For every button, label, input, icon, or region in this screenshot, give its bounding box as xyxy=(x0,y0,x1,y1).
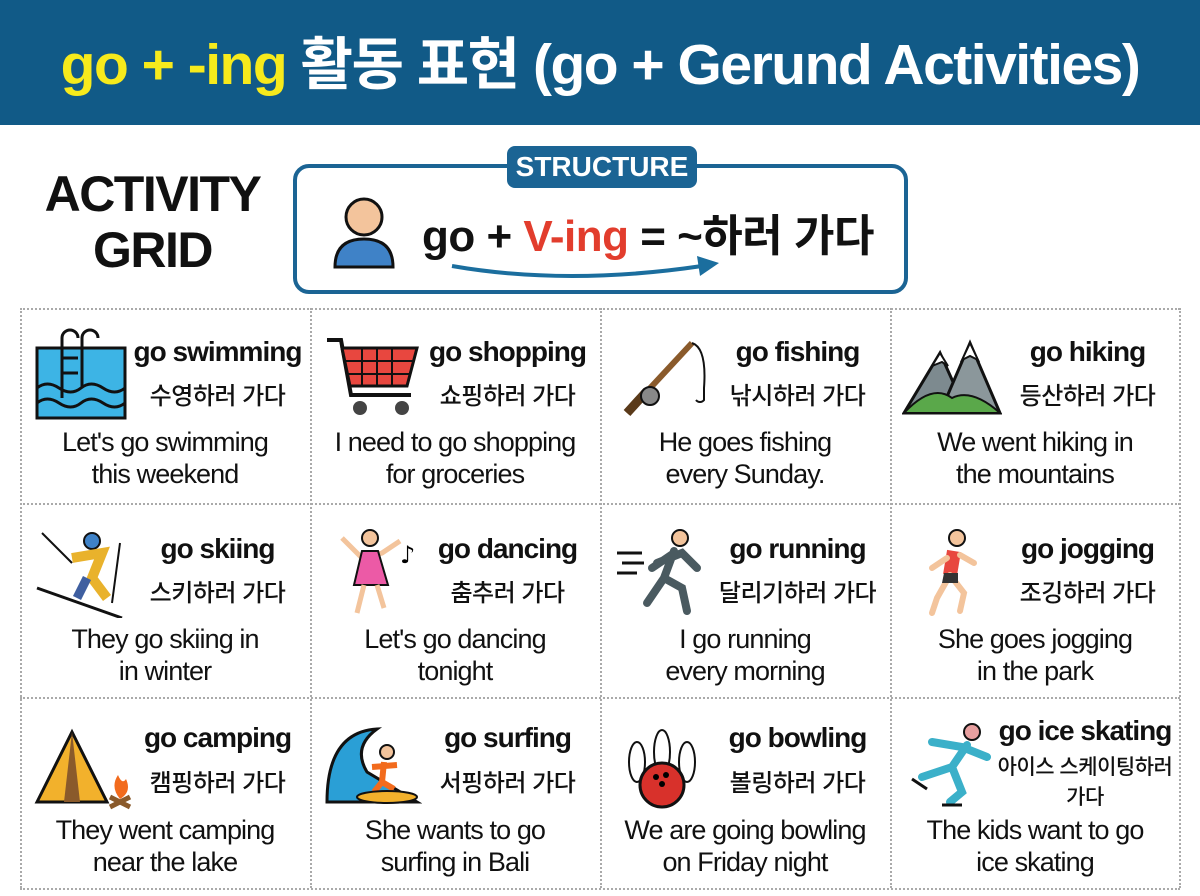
icon: runner xyxy=(617,529,701,615)
panel: go hiking: 등산하러 가다 xyxy=(1020,383,1155,410)
panel: go skiing: in winter xyxy=(119,656,211,686)
panel: go hiking xyxy=(902,336,1156,489)
panel: go swimming: go swimming xyxy=(134,336,301,367)
panel: go surfing: She wants to go xyxy=(365,815,545,845)
panel: go skiing xyxy=(36,532,286,686)
title banner: go + -ing 활동 표현 (go + Gerund Activities) xyxy=(61,33,1139,97)
icon: mountains xyxy=(902,339,1002,414)
panel: go ice skating: 가다 xyxy=(1066,786,1104,809)
panel: go fishing: every Sunday. xyxy=(666,459,824,489)
panel: go jogging: She goes jogging xyxy=(938,624,1132,654)
structure box xyxy=(293,164,908,294)
icon: surfer xyxy=(326,727,422,804)
heading: activity grid: GRID xyxy=(93,222,212,278)
panel: go swimming: Let's go swimming xyxy=(62,427,268,457)
formula: go + V-ing = ~하러 가다 xyxy=(422,212,874,261)
panel: go hiking: the mountains xyxy=(956,459,1114,489)
panel: go ice skating: go ice skating xyxy=(999,715,1171,746)
panel: go swimming: this weekend xyxy=(92,459,238,489)
panel: go swimming: 수영하러 가다 xyxy=(150,383,285,410)
panel: go jogging xyxy=(929,529,1156,686)
panel: go running: go running xyxy=(729,533,866,564)
panel: go dancing: 춤추러 가다 xyxy=(450,580,565,607)
heading: activity grid: ACTIVITY xyxy=(45,166,260,222)
panel: go bowling: go bowling xyxy=(729,722,866,753)
panel: go surfing: surfing in Bali xyxy=(381,847,529,877)
panel: go shopping: I need to go shopping xyxy=(335,427,575,457)
panel: go fishing: go fishing xyxy=(736,336,859,367)
panel: go hiking: We went hiking in xyxy=(937,427,1133,457)
panel: go camping xyxy=(34,722,291,877)
panel: go ice skating: 아이스 스케이팅하러 xyxy=(998,756,1172,779)
panel: go shopping: 쇼핑하러 가다 xyxy=(440,383,575,410)
icon: dancer: ♪ xyxy=(400,541,415,569)
panel: go camping: go camping xyxy=(144,722,291,753)
icon: pool xyxy=(36,328,126,420)
panel: go dancing: go dancing xyxy=(438,533,577,564)
panel: go running xyxy=(617,529,876,686)
panel: go skiing: 스키하러 가다 xyxy=(150,580,285,607)
icon: bowling xyxy=(628,729,696,808)
panel: go jogging: 조깅하러 가다 xyxy=(1020,580,1155,607)
panel: go skiing: They go skiing in xyxy=(71,624,259,654)
panel: go dancing: Let's go dancing xyxy=(364,624,546,654)
panel: go jogging: in the park xyxy=(977,656,1093,686)
icon: cart xyxy=(327,338,419,415)
panel: go surfing: 서핑하러 가다 xyxy=(440,770,575,797)
panel: go fishing: He goes fishing xyxy=(659,427,831,457)
panel: go bowling xyxy=(624,722,866,877)
panel: go jogging: go jogging xyxy=(1021,533,1154,564)
panel: go camping: They went camping xyxy=(56,815,274,845)
panel: go bowling: We are going bowling xyxy=(624,815,866,845)
structure tag xyxy=(507,146,697,188)
panel: go running: 달리기하러 가다 xyxy=(719,580,876,607)
structure tag: STRUCTURE xyxy=(516,151,688,182)
panel: go ice skating: ice skating xyxy=(976,847,1094,877)
panel: go skiing: go skiing xyxy=(161,533,274,564)
panel: go hiking: go hiking xyxy=(1030,336,1145,367)
panel: go shopping xyxy=(327,336,586,489)
panel: go surfing: go surfing xyxy=(444,722,571,753)
icon: fishing rod xyxy=(624,341,706,416)
panel: go running: I go running xyxy=(679,624,811,654)
icon: jogger xyxy=(929,529,977,616)
icon: dancer xyxy=(340,529,415,614)
panel: go shopping: for groceries xyxy=(386,459,524,489)
title banner xyxy=(0,0,1200,125)
panel: go fishing xyxy=(624,336,866,489)
panel: go ice skating xyxy=(911,715,1172,877)
panel: go bowling: on Friday night xyxy=(662,847,828,877)
panel: go dancing xyxy=(340,529,577,686)
panel: go swimming xyxy=(36,328,301,489)
heading: activity grid xyxy=(45,166,261,278)
icon: skater xyxy=(911,723,991,806)
icon: person xyxy=(334,198,394,268)
panel: go ice skating: The kids want to go xyxy=(926,815,1144,845)
panel: go dancing: tonight xyxy=(418,656,492,686)
panel: go fishing: 낚시하러 가다 xyxy=(730,383,865,410)
panel: go surfing xyxy=(326,722,576,877)
icon: tent xyxy=(34,728,132,810)
panel: go camping: near the lake xyxy=(93,847,237,877)
panel: go shopping: go shopping xyxy=(429,336,586,367)
icon: skier xyxy=(36,532,122,618)
panel: go bowling: 볼링하러 가다 xyxy=(730,770,865,797)
panel: go camping: 캠핑하러 가다 xyxy=(150,770,285,797)
arrow xyxy=(452,256,719,278)
panel: go running: every morning xyxy=(665,656,825,686)
